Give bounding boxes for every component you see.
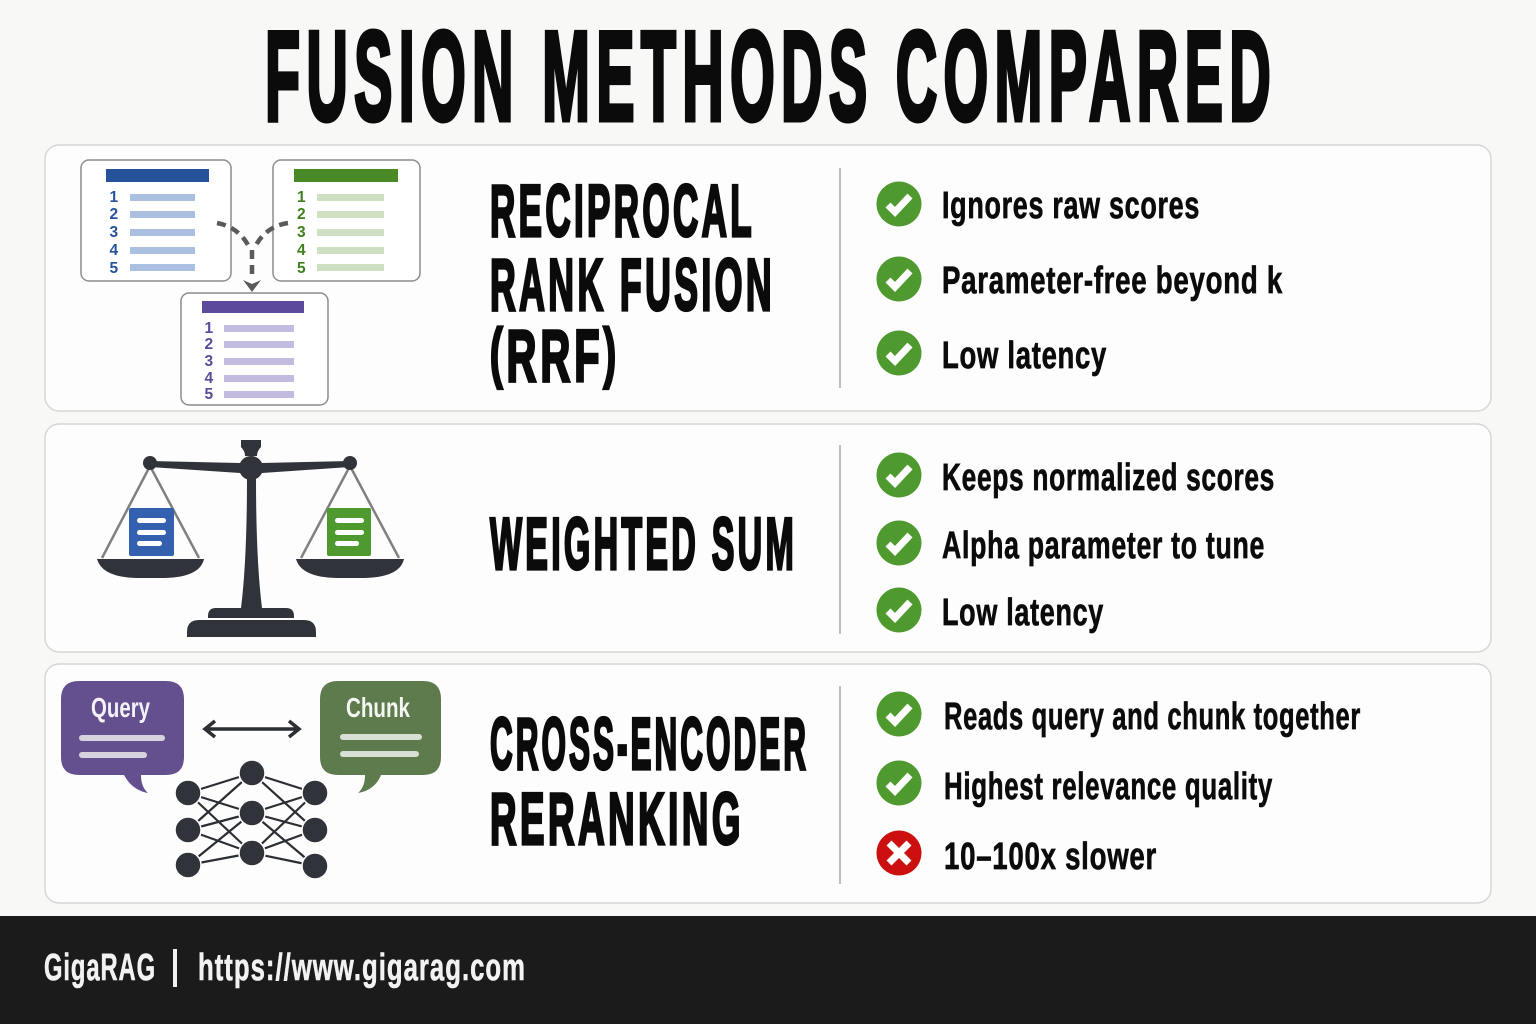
icon: check	[876, 182, 922, 226]
icon: check	[876, 520, 922, 566]
brand name: GigaRAG	[44, 947, 156, 989]
heading: RRF	[490, 171, 775, 397]
green ranked list: 3	[297, 224, 306, 241]
list: RRF traits	[876, 182, 1283, 377]
panel: reciprocal rank fusion	[45, 145, 1491, 411]
arrow: two-way	[205, 721, 299, 737]
list: cross-encoder traits	[876, 692, 1361, 878]
heading: RRF: RRF	[506, 316, 604, 397]
trait: highest relevance: Highest relevance quality	[944, 766, 1273, 808]
green ranked list: 2	[297, 206, 306, 223]
heading: cross-encoder reranking: RERANKING	[490, 779, 744, 860]
purple merged list	[181, 293, 328, 405]
panel: weighted sum	[45, 424, 1491, 652]
panel: reciprocal rank fusion: RANK FUSION	[490, 245, 775, 326]
chunk bubble: Chunk	[346, 692, 410, 723]
green ranked list: 4	[297, 242, 306, 259]
trait: low latency: Low latency	[942, 335, 1107, 377]
trait: low latency: Low latency	[942, 592, 1104, 634]
query bubble: Query	[91, 692, 150, 723]
blue ranked list: 4	[110, 242, 118, 259]
panel: cross-encoder reranking	[45, 664, 1491, 903]
footer	[0, 916, 1536, 1024]
green document	[327, 508, 371, 556]
icon: balance scale	[97, 440, 404, 637]
icon: check	[876, 692, 922, 736]
purple merged list: 3	[204, 353, 214, 370]
icon: cross	[876, 830, 922, 876]
icon: check	[876, 330, 922, 376]
heading: RRF: )	[604, 315, 620, 389]
neural network	[175, 760, 328, 879]
trait: ignores raw scores: Ignores raw scores	[942, 185, 1200, 227]
trait: keeps normalized scores: Keeps normalized scores	[942, 457, 1275, 499]
chunk bubble	[320, 681, 441, 793]
arrow: dashed merge	[217, 223, 288, 292]
icon: check	[876, 256, 922, 302]
icon: check	[876, 452, 922, 498]
trait: slower: 10–100x slower	[944, 836, 1157, 878]
heading: RRF: (	[490, 315, 506, 389]
blue ranked list: 3	[110, 224, 118, 241]
green ranked list: 5	[297, 260, 306, 277]
panel: cross-encoder reranking: CROSS-ENCODER	[490, 704, 809, 785]
blue ranked list: 5	[110, 260, 118, 277]
icon: ranked lists merging	[81, 160, 420, 405]
blue document	[129, 508, 174, 556]
green ranked list: 1	[297, 189, 306, 206]
blue ranked list	[81, 160, 231, 281]
heading: RRF: RECIPROCAL	[490, 171, 755, 252]
green ranked list	[273, 160, 420, 281]
trait: alpha parameter: Alpha parameter to tune	[942, 525, 1265, 567]
purple merged list: 2	[204, 336, 213, 353]
icon: check	[876, 760, 922, 806]
heading: cross-encoder reranking	[490, 704, 809, 860]
list: weighted sum traits	[876, 452, 1275, 634]
purple merged list: 5	[204, 386, 214, 403]
query bubble	[61, 681, 184, 793]
trait: parameter-free: Parameter-free beyond k	[942, 260, 1283, 302]
purple merged list: 4	[204, 370, 214, 387]
purple merged list: 1	[204, 320, 214, 337]
blue ranked list: 2	[110, 206, 118, 223]
icon: check	[876, 588, 922, 632]
panel: weighted sum: WEIGHTED SUM	[490, 504, 797, 585]
icon: query and chunk network	[61, 681, 441, 879]
blue ranked list: 1	[110, 189, 118, 206]
website url: https://www.gigarag.com	[198, 947, 526, 989]
